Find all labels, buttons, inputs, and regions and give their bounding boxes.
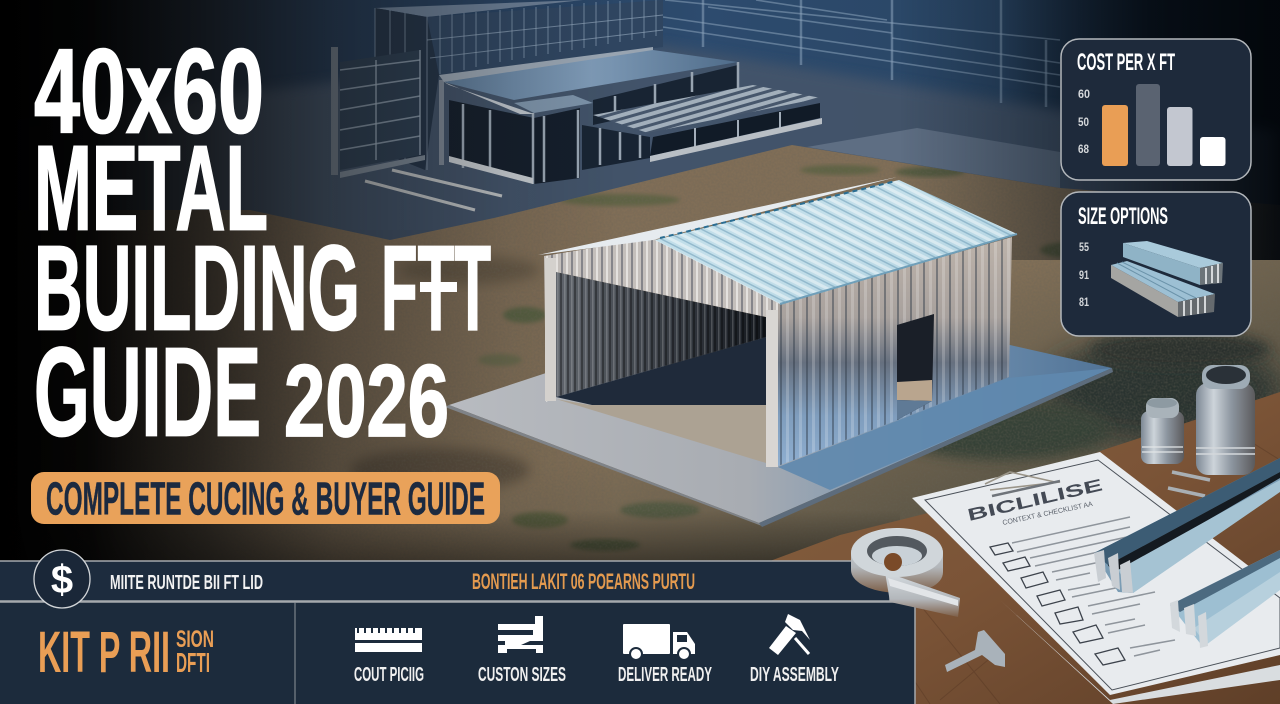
- chart axis labels: [1078, 87, 1090, 156]
- icon: hammer: [769, 614, 810, 655]
- side door opening: [897, 314, 934, 420]
- text: FTT: [381, 220, 491, 356]
- icon: custom sizes: [498, 616, 543, 653]
- blueprint building, background: [331, 0, 1060, 210]
- metal rails on table: [1094, 458, 1280, 648]
- checklist paper: [912, 452, 1280, 704]
- size labels: 91: [1079, 268, 1089, 282]
- title: BUILDING: [34, 220, 360, 356]
- clipboard clip: [985, 472, 1060, 496]
- gable end wall: [544, 238, 780, 467]
- kit price small text: SION: [176, 626, 214, 653]
- checklist subtitle: CONTEXT & CHECKLIST AA: [1002, 501, 1094, 527]
- icon: metal beams: [1111, 241, 1223, 317]
- interior: [556, 272, 766, 397]
- subtitle pill: COMPLETE CUCING & BUYER GUIDE: [46, 472, 485, 524]
- chart axis labels: 68: [1078, 142, 1089, 156]
- feature labels: DIY ASSEMBLY: [750, 664, 839, 686]
- fence frame lines: [663, 0, 1060, 107]
- kit price heading: KIT P RII: [38, 620, 170, 685]
- bar chart: [1102, 84, 1226, 166]
- icon: dollar badge: [34, 550, 90, 608]
- kit price small text: [176, 626, 214, 678]
- kit price small text: DFTI: [176, 647, 210, 678]
- feature labels: COUT PICIIG: [354, 664, 424, 686]
- banner center text: BONTIEH LAKIT 06 POEARNS PURTU: [472, 569, 695, 594]
- panel: bottom top bar: [0, 561, 890, 601]
- title: GUIDE: [34, 322, 261, 462]
- lower striped roof: [593, 85, 821, 133]
- subtitle pill: [31, 472, 500, 524]
- checklist rows: [990, 517, 1175, 665]
- icon: ruler: [355, 628, 422, 652]
- feature labels: CUSTON SIZES: [478, 664, 566, 686]
- main metal building on slab: [445, 177, 1113, 527]
- small metal clip: [945, 630, 1005, 672]
- heading: size options: SIZE OPTIONS: [1078, 203, 1168, 230]
- metal collar fitting: [851, 528, 960, 617]
- tall wire frame: [331, 0, 663, 178]
- checklist heading: BICLILISE: [966, 475, 1104, 525]
- icon: delivery truck: [623, 624, 695, 660]
- roof: [538, 177, 897, 255]
- panel: bottom features: [0, 602, 915, 704]
- canopy roof: [439, 47, 653, 82]
- background scene: [108, 0, 1280, 560]
- size labels: 81: [1079, 295, 1089, 309]
- title: METAL: [34, 120, 268, 256]
- title: 2026: [284, 344, 449, 458]
- size labels: 55: [1079, 240, 1089, 254]
- icon: dollar badge: $: [51, 558, 73, 602]
- chart axis labels: 60: [1078, 87, 1090, 101]
- panel: size options: [1061, 192, 1251, 336]
- panel: cost per sq ft chart: [1061, 39, 1251, 180]
- top right dark fade: [900, 0, 1280, 260]
- title: [34, 24, 491, 462]
- feature labels: DELIVER READY: [618, 664, 712, 686]
- title: 40x60: [34, 24, 264, 158]
- metal jars: [1141, 365, 1255, 496]
- size labels: [1079, 240, 1089, 309]
- chart axis labels: 50: [1078, 115, 1089, 129]
- canopy glazing: [449, 100, 534, 180]
- slab: [449, 345, 1112, 523]
- heading: cost per ft: COST PER X FT: [1077, 49, 1175, 76]
- table surface: [770, 392, 1280, 704]
- banner left text: MIITE RUNTDE BII FT LID: [110, 572, 263, 594]
- right wall: [778, 237, 1012, 466]
- feature labels: [354, 664, 839, 686]
